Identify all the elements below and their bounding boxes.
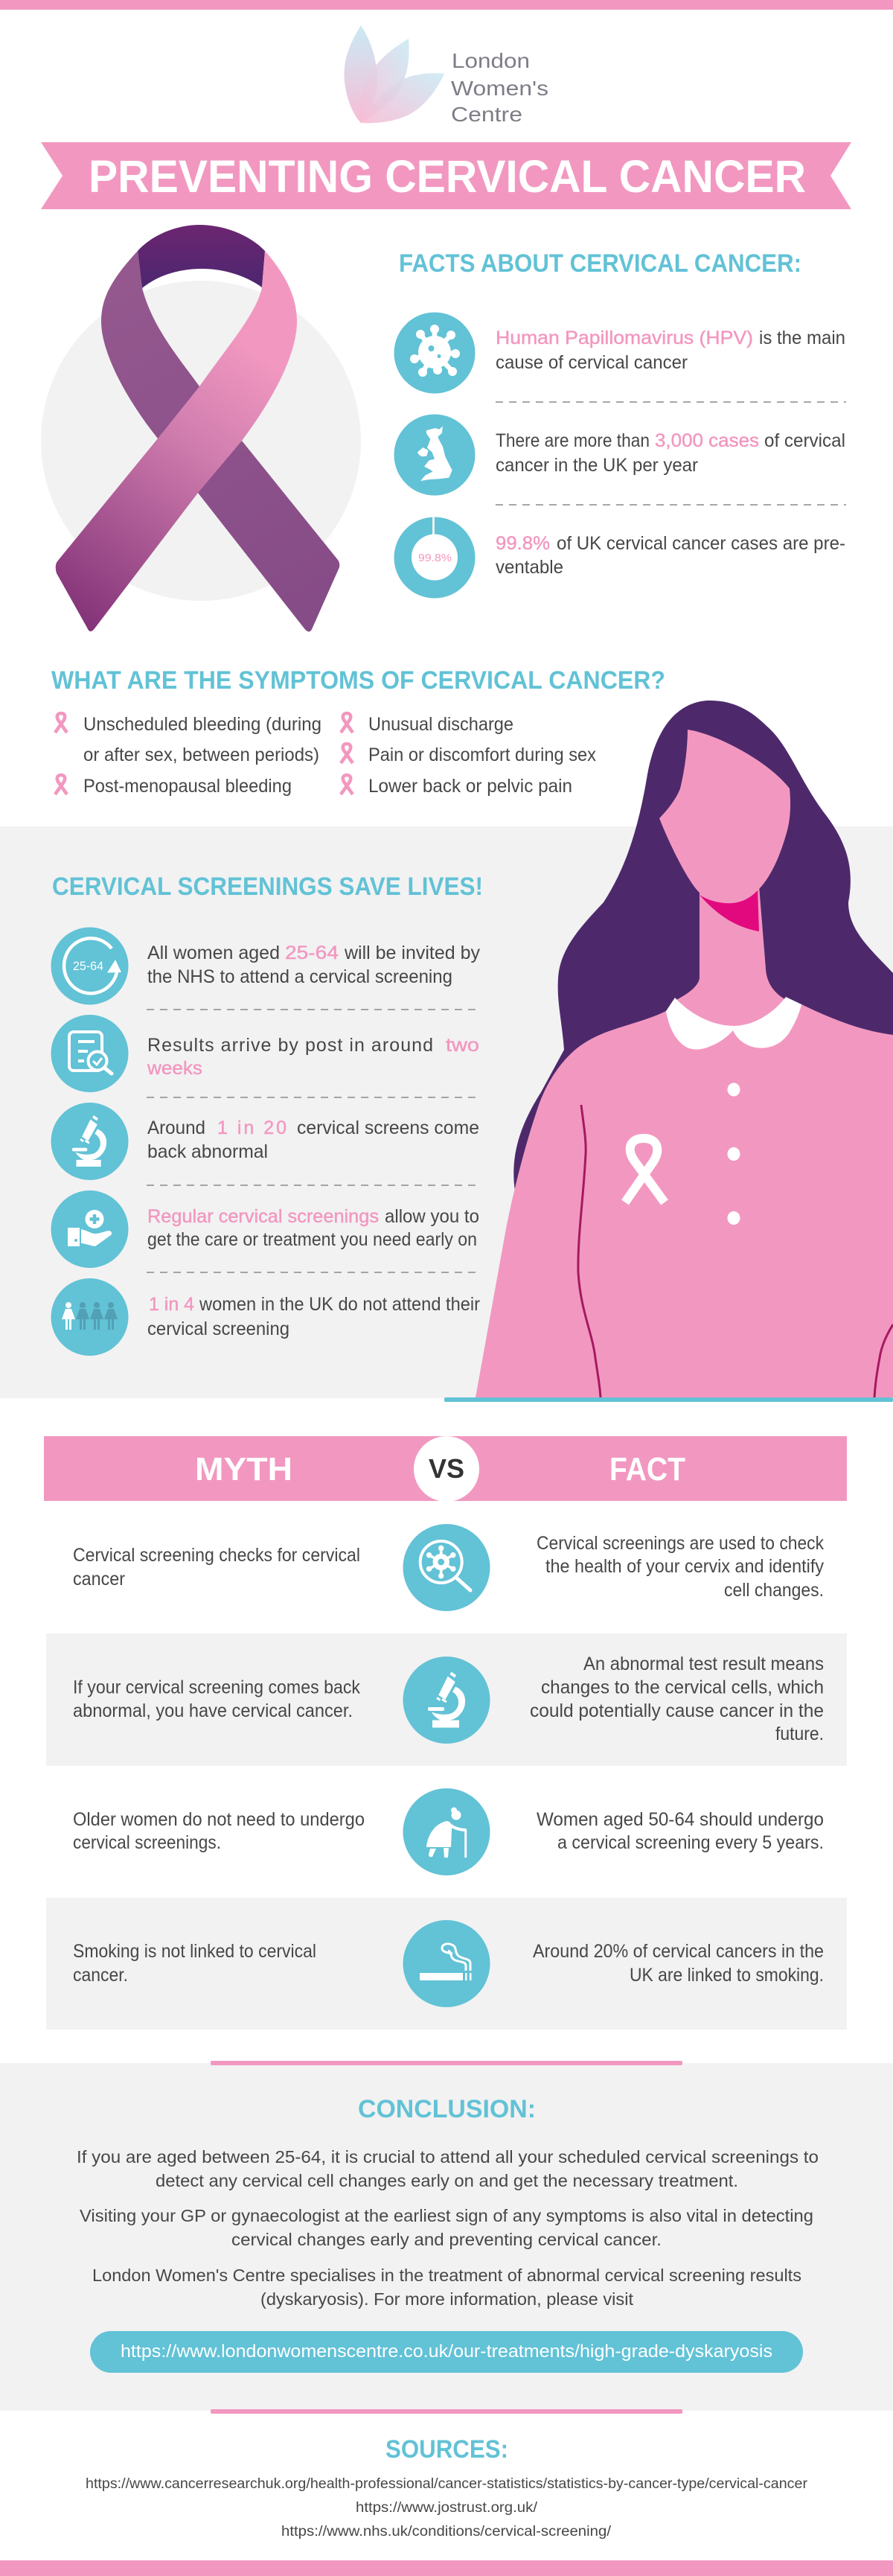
VS badge	[414, 1436, 479, 1502]
sources list: https://www.jostrust.org.uk/	[356, 2500, 538, 2516]
myth text: Smoking is not linked to cervical	[73, 1941, 316, 1962]
text: get the care or treatment you need early on	[147, 1229, 477, 1250]
icon: logo petals	[344, 25, 444, 123]
myth text: If your cervical screening comes back	[73, 1677, 360, 1697]
text: two	[446, 1035, 479, 1056]
chart: 99.8% donut: 99.8%	[418, 552, 452, 564]
panel: screenings background	[0, 826, 893, 1398]
fact text: could potentially cause cancer in the	[530, 1700, 824, 1721]
symptoms text	[83, 714, 596, 797]
teal line under panel	[444, 1397, 893, 1402]
conclusion text: cervical changes early and preventing cervical cancer.	[231, 2230, 662, 2249]
FACT label: FACT	[609, 1451, 685, 1488]
fact 2	[394, 414, 845, 496]
fact 1	[394, 313, 845, 393]
fact text	[533, 1941, 824, 1986]
text	[147, 1294, 480, 1339]
heading: conclusion: CONCLUSION:	[358, 2095, 536, 2123]
text: 3,000 cases: cancer in the UK per year	[496, 455, 698, 476]
icon: white ribbon on chest	[625, 1138, 665, 1202]
screening 1	[51, 928, 480, 1005]
text: HPV: is the main	[759, 328, 845, 348]
text: 3,000 cases: There are more than	[496, 430, 650, 451]
row 4: myth and fact	[46, 1898, 847, 2030]
MYTH label: MYTH	[195, 1451, 292, 1488]
screening 4	[51, 1190, 479, 1268]
screening 2	[51, 1015, 479, 1092]
screening 5	[51, 1278, 480, 1356]
symptoms text: Unscheduled bleeding (during	[83, 714, 321, 735]
text	[147, 1206, 479, 1250]
myth text	[73, 1941, 316, 1986]
myth text	[73, 1809, 365, 1853]
text: Around	[147, 1118, 205, 1138]
text: preventable: 99.8%	[496, 533, 550, 554]
bottom band	[0, 2560, 893, 2576]
conclusion text: If you are aged between 25-64, it is crucial to attend all your scheduled cervical screenings to	[77, 2147, 819, 2167]
text: 3,000 cases: of cervical	[764, 430, 845, 451]
logo wordmark	[451, 49, 548, 126]
symptoms text: Post-menopausal bleeding	[83, 776, 292, 797]
sources list	[86, 2476, 808, 2540]
fact text: future.	[775, 1724, 824, 1744]
icon: virus	[394, 313, 475, 393]
text	[147, 943, 480, 987]
fact 3	[394, 517, 845, 599]
screening 3	[51, 1103, 479, 1180]
text: weeks	[147, 1058, 202, 1079]
icon: 25-64 cycle: 25-64	[73, 959, 103, 973]
fact text: UK are linked to smoking.	[630, 1965, 824, 1986]
illustration: woman	[476, 701, 893, 1397]
myth text: abnormal, you have cervical cancer.	[73, 1700, 353, 1721]
heading: screenings: CERVICAL SCREENINGS SAVE LIVES!	[52, 873, 483, 901]
text: 3,000 cases	[496, 430, 845, 476]
conclusion text	[77, 2147, 819, 2309]
logo wordmark: Women's	[451, 77, 548, 100]
myth text: cancer.	[73, 1965, 128, 1986]
fact text: a cervical screening every 5 years.	[557, 1832, 824, 1853]
text: 3,000 cases: 3,000 cases	[655, 430, 759, 451]
row 3: myth and fact	[73, 1788, 824, 1875]
top band	[0, 0, 893, 10]
icon: hand with medical cross	[51, 1190, 128, 1268]
symptoms text: Pain or discomfort during sex	[368, 745, 596, 765]
link pill	[90, 2331, 803, 2373]
conclusion text: Visiting your GP or gynaecologist at the earliest sign of any symptoms is also vital in detecting	[80, 2206, 813, 2225]
icon: results document	[51, 1015, 128, 1092]
myth text: cancer	[73, 1569, 125, 1590]
icon: microscope	[72, 1115, 106, 1167]
text: back abnormal	[147, 1141, 268, 1162]
logo wordmark: London	[452, 49, 530, 72]
conclusion text: (dyskaryosis). For more information, please visit	[260, 2289, 633, 2309]
icon: UK map	[394, 414, 475, 496]
icon: microscope	[428, 1672, 465, 1727]
grey circle behind ribbon	[41, 281, 361, 601]
title banner	[41, 142, 851, 209]
panel: conclusion	[0, 2061, 893, 2414]
myth text: cervical screenings.	[73, 1832, 221, 1853]
text: HPV: cause of cervical cancer	[496, 352, 688, 373]
text: cervical screening	[147, 1319, 289, 1339]
icon: magnifier with virus	[403, 1524, 490, 1611]
fact text: changes to the cervical cells, which	[541, 1677, 824, 1697]
fact text	[537, 1809, 824, 1853]
fact text: the health of your cervix and identify	[545, 1556, 824, 1577]
myth text: Older women do not need to undergo	[73, 1809, 365, 1830]
illustration: awareness ribbon	[56, 225, 339, 631]
text: Results arrive by post in around	[147, 1035, 433, 1056]
icon: bullet ribbons	[55, 713, 353, 794]
icon: older woman with cane	[403, 1788, 490, 1875]
conclusion text: detect any cervical cell changes early on and get the necessary treatment.	[156, 2171, 738, 2190]
heading: facts: FACTS ABOUT CERVICAL CANCER:	[399, 249, 801, 278]
text: preventable	[496, 533, 845, 578]
buttons	[728, 1083, 740, 1225]
text: allow you to	[385, 1206, 479, 1227]
symptoms text: Unusual discharge	[368, 714, 513, 735]
fact text	[530, 1654, 824, 1744]
fact text	[537, 1533, 824, 1601]
icon: 25-64 cycle	[51, 928, 128, 1005]
text: 1 in 20	[217, 1118, 287, 1138]
text: women in the UK do not attend their	[199, 1294, 480, 1315]
text: HPV: Human Papillomavirus (HPV)	[496, 328, 753, 348]
title: PREVENTING CERVICAL CANCER	[89, 151, 806, 202]
text: HPV	[496, 328, 845, 373]
myth text: Cervical screening checks for cervical	[73, 1545, 360, 1566]
text: will be invited by	[344, 943, 480, 963]
myth text	[73, 1545, 360, 1590]
fact text: An abnormal test result means	[583, 1654, 824, 1674]
logo: London Women's Centre	[344, 25, 548, 126]
fact text: Cervical screenings are used to check	[537, 1533, 824, 1554]
fact text: Around 20% of cervical cancers in the	[533, 1941, 824, 1962]
text: All women aged	[147, 943, 280, 963]
symptom list	[55, 713, 596, 797]
symptoms text: Lower back or pelvic pain	[368, 776, 572, 797]
conclusion text: London Women's Centre specialises in the treatment of abnormal cervical screening results	[92, 2266, 801, 2285]
text: preventable: of UK cervical cancer cases are pre-	[557, 533, 845, 554]
fact text: Women aged 50-64 should undergo	[537, 1809, 824, 1830]
sources list: https://www.cancerresearchuk.org/health-professional/cancer-statistics/statistics-by-cancer-type/cervical-cancer	[86, 2476, 808, 2492]
row 2: myth and fact	[46, 1633, 847, 1766]
sources list: https://www.nhs.uk/conditions/cervical-screening/	[281, 2524, 612, 2540]
text	[147, 1118, 479, 1162]
text: preventable: ventable	[496, 557, 563, 578]
row 1: myth and fact	[73, 1524, 824, 1611]
text: Regular cervical screenings	[147, 1206, 379, 1227]
icon: 1 in 4 women	[51, 1278, 128, 1356]
chart: 99.8% donut	[394, 517, 475, 599]
myth text	[73, 1677, 360, 1721]
text: the NHS to attend a cervical screening	[147, 966, 452, 987]
text: cervical screens come	[297, 1118, 479, 1138]
heading: symptoms: WHAT ARE THE SYMPTOMS OF CERVICAL CANCER?	[51, 666, 665, 695]
link pill: https://www.londonwomenscentre.co.uk/our-treatments/high-grade-dyskaryosis	[121, 2341, 772, 2362]
icon: cigarette	[403, 1920, 490, 2007]
text: 1 in 4	[149, 1294, 194, 1315]
symptoms text: or after sex, between periods)	[83, 745, 319, 765]
text: 25-64	[285, 943, 339, 963]
fact text: cell changes.	[724, 1580, 824, 1601]
heading: sources: SOURCES:	[385, 2435, 508, 2464]
text	[147, 1035, 479, 1079]
myth vs fact header	[44, 1436, 847, 1502]
VS badge: VS	[429, 1453, 464, 1484]
logo wordmark: Centre	[451, 103, 522, 126]
